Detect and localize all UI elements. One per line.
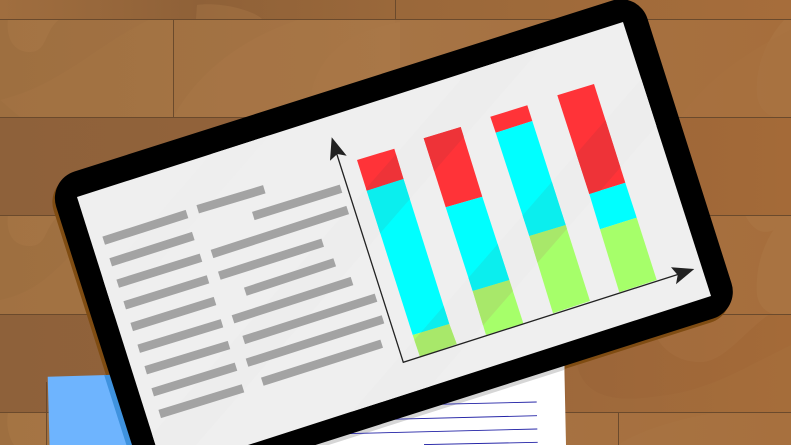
text placeholder lines: right column <box>198 189 383 382</box>
text placeholder lines: left column <box>104 214 243 414</box>
bar 1 <box>357 149 457 357</box>
chart axes with arrows <box>330 137 694 362</box>
bar 4 <box>557 84 657 292</box>
sheen over bars <box>366 120 620 356</box>
stacked bar chart <box>357 84 657 357</box>
paper sheet with ruled lines <box>316 366 566 445</box>
blue folder <box>48 374 132 445</box>
tablet screen <box>77 22 711 445</box>
bar 2 <box>424 127 523 335</box>
bar 3 <box>490 105 590 313</box>
